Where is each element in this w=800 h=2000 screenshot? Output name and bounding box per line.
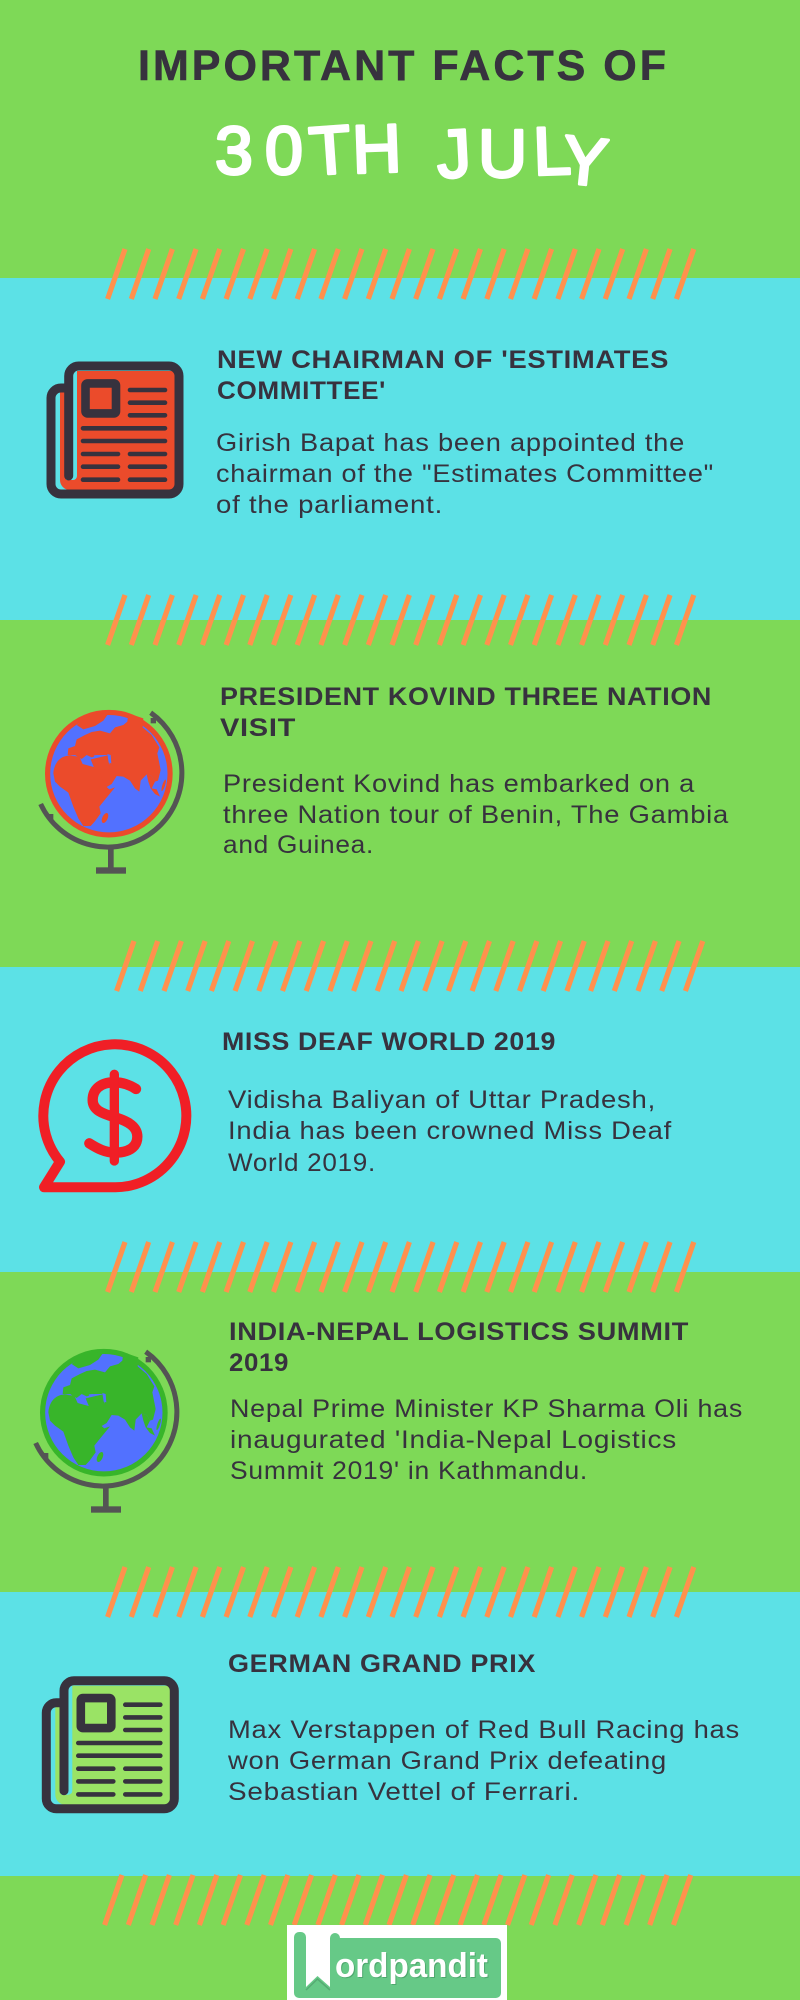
heading: NEW CHAIRMAN OF 'ESTIMATES [217, 346, 669, 374]
body text: inaugurated 'India-Nepal Logistics [230, 1426, 677, 1454]
icon: green newspaper [46, 1681, 174, 1809]
body text: India has been crowned Miss Deaf [228, 1117, 672, 1145]
body text: and Guinea. [223, 831, 374, 859]
heading [220, 683, 712, 742]
icon: red newspaper [51, 366, 179, 494]
body text [216, 429, 714, 519]
title: important facts of: IMPORTANT FACTS OF [138, 42, 666, 90]
body text [230, 1395, 743, 1485]
body text: Girish Bapat has been appointed the [216, 429, 685, 457]
body text [223, 770, 729, 859]
heading: INDIA-NEPAL LOGISTICS SUMMIT [229, 1318, 689, 1346]
panel: new chairman [0, 278, 800, 620]
logo wordmark: ordpandit [335, 1947, 488, 1985]
panel: german grand prix [0, 1592, 800, 1876]
panel: india-nepal summit [0, 1272, 800, 1592]
body text: of the parliament. [216, 491, 443, 519]
heading [229, 1318, 689, 1377]
body text: World 2019. [228, 1149, 376, 1177]
title: date: 30TH JULY [215, 110, 611, 202]
panel: miss deaf world [0, 967, 800, 1272]
logo: wordpandit [287, 1925, 507, 2000]
heading: MISS DEAF WORLD 2019 [222, 1028, 556, 1056]
heading [217, 346, 669, 405]
panel: header [0, 0, 800, 278]
heading: GERMAN GRAND PRIX [228, 1650, 536, 1678]
heading: VISIT [220, 714, 296, 742]
heading: PRESIDENT KOVIND THREE NATION [220, 683, 712, 711]
body text: three Nation tour of Benin, The Gambia [223, 801, 729, 829]
body text [227, 1716, 740, 1806]
icon: green globe [36, 1349, 177, 1513]
heading: COMMITTEE' [217, 377, 386, 405]
body text: Nepal Prime Minister KP Sharma Oli has [230, 1395, 743, 1423]
body text: Summit 2019' in Kathmandu. [230, 1457, 588, 1485]
body text: Vidisha Baliyan of Uttar Pradesh, [228, 1086, 656, 1114]
body text: chairman of the "Estimates Committee" [216, 460, 714, 488]
icon: dollar speech bubble [43, 1044, 186, 1187]
icon: red globe [41, 710, 182, 874]
body text: President Kovind has embarked on a [223, 770, 695, 798]
body text: Max Verstappen of Red Bull Racing has [228, 1716, 740, 1744]
panel: footer [0, 1876, 800, 2000]
heading: 2019 [229, 1349, 289, 1377]
body text: won German Grand Prix defeating [227, 1747, 667, 1775]
panel: president kovind [0, 620, 800, 967]
body text [228, 1086, 672, 1177]
body text: Sebastian Vettel of Ferrari. [228, 1778, 580, 1806]
